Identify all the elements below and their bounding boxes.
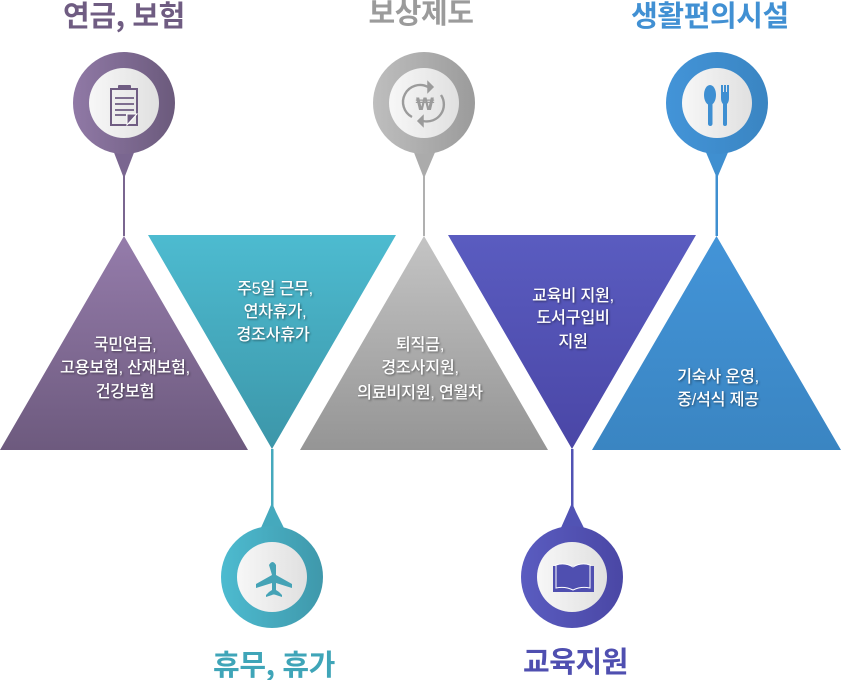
triangle: compensation system — [300, 236, 548, 450]
pin: living facilities — [666, 52, 768, 236]
text: leave items: 경조사휴가 — [236, 326, 310, 344]
pin: compensation system — [373, 52, 475, 236]
triangle: living facilities — [592, 236, 841, 450]
text: facility items: 기숙사 운영, — [677, 368, 759, 386]
heading: education support: 교육지원 — [523, 639, 628, 680]
triangle: leave and vacation — [148, 235, 396, 449]
text: pension and insurance items: 고용보험, 산재보험, — [60, 359, 190, 377]
text: leave items — [236, 280, 313, 344]
text: pension and insurance items: 국민연금, — [94, 336, 156, 354]
icon: won currency cycle — [403, 82, 444, 126]
pin: pension and insurance — [73, 52, 175, 236]
text: compensation items: 경조사지원, — [381, 359, 459, 377]
triangle: education support — [448, 235, 696, 449]
triangle: pension and insurance — [0, 236, 248, 450]
text: leave items: 연차휴가, — [244, 303, 306, 321]
text: pension and insurance items — [60, 336, 190, 401]
icon: spoon and fork — [704, 85, 729, 126]
pin: leave and vacation — [221, 449, 323, 628]
icon: airplane — [256, 562, 292, 597]
text: compensation items: 퇴직금, — [396, 336, 444, 354]
text: facility items — [677, 368, 759, 409]
text: facility items: 중/석식 제공 — [677, 391, 759, 409]
icon glyph: won sign: ₩ — [416, 95, 435, 115]
text: compensation items — [357, 336, 483, 402]
icon: clipboard — [111, 85, 137, 125]
text: leave items: 주5일 근무, — [237, 280, 313, 298]
text: education items — [532, 287, 614, 351]
text: compensation items: 의료비지원, 연월차 — [357, 384, 483, 402]
text: education items: 지원 — [558, 333, 588, 351]
pin: education support — [521, 449, 623, 628]
text: pension and insurance items: 건강보험 — [96, 383, 154, 401]
text: education items: 교육비 지원, — [532, 287, 614, 305]
text: education items: 도서구입비 — [536, 309, 610, 327]
icon: open book — [553, 564, 594, 592]
